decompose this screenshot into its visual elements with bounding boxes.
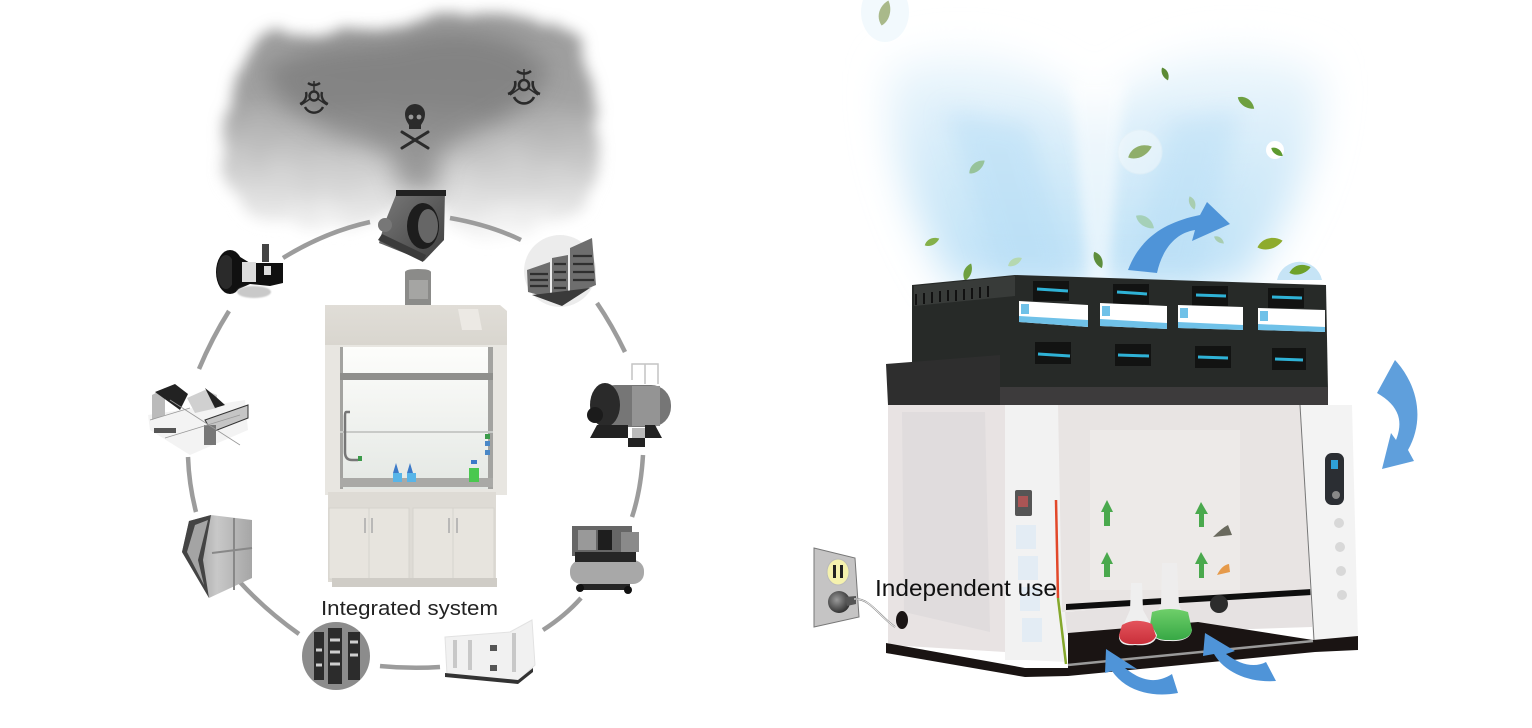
leaves: [876, 0, 1312, 282]
right column: [1300, 405, 1358, 640]
label: integrated system: Integrated system: [321, 598, 498, 620]
icon: cooling towers: [524, 235, 596, 307]
icon: burner: [216, 244, 283, 298]
hood top panel: [325, 305, 507, 345]
side port: [896, 611, 908, 629]
round buttons: [1334, 518, 1347, 600]
sash window: [340, 347, 493, 489]
module labels: [1019, 301, 1325, 332]
fume particles: [1213, 525, 1232, 575]
blue indicator bars: [1037, 289, 1303, 360]
wall outlet and plug: [814, 548, 895, 627]
red flask: [1119, 583, 1157, 645]
smoke cloud: [219, 16, 599, 238]
icon: skull and crossbones: [402, 104, 428, 148]
icon: ductwork diagram: [148, 384, 248, 455]
icon: air handling unit: [445, 620, 535, 684]
hood duct: [405, 269, 431, 305]
upper module recesses: [1033, 281, 1304, 308]
front post: [1005, 405, 1067, 662]
arrow: side circulation: [1377, 360, 1417, 469]
sash handle: [345, 412, 358, 460]
ductless fume hood: [886, 275, 1358, 677]
label: independent use: Independent use: [875, 575, 1057, 601]
icon: activated carbon scrubber: [182, 515, 252, 598]
rocker switch: [1015, 490, 1032, 516]
bubbles: [1118, 130, 1322, 280]
lower module recesses: [1035, 342, 1306, 370]
sash bar and lower wall: [1065, 589, 1312, 635]
base cabinet: [328, 492, 496, 582]
arrow: air intake left: [1105, 649, 1178, 694]
icon: centrifugal fan: [378, 190, 446, 262]
icon: compressor: [570, 526, 644, 594]
green bottle: [469, 460, 479, 482]
carbon filter housing: [912, 275, 1328, 390]
fume hood: [325, 269, 507, 587]
sash edge strip: [1056, 500, 1058, 598]
ring connecting equipment: [188, 218, 643, 668]
clean air glow: [861, 0, 1321, 285]
icon: biohazard right: [508, 69, 540, 103]
blue bottles: [393, 463, 416, 482]
hood lip: [886, 355, 1328, 405]
arrow: air intake right: [1203, 633, 1276, 681]
back wall: [1058, 405, 1314, 612]
control display: [1325, 453, 1344, 505]
base strips and work surface: [886, 622, 1358, 677]
arrow: air exiting top: [1128, 202, 1230, 273]
green flask: [1150, 563, 1192, 641]
control buttons: [485, 434, 490, 455]
hood body: [325, 345, 507, 495]
left side panel: [888, 405, 1005, 652]
square buttons: [1016, 525, 1042, 642]
icon: boiler: [587, 364, 671, 447]
icon: biohazard left: [300, 81, 328, 113]
icon: control cabinet: [302, 622, 370, 690]
green upward arrows: [1101, 500, 1208, 578]
